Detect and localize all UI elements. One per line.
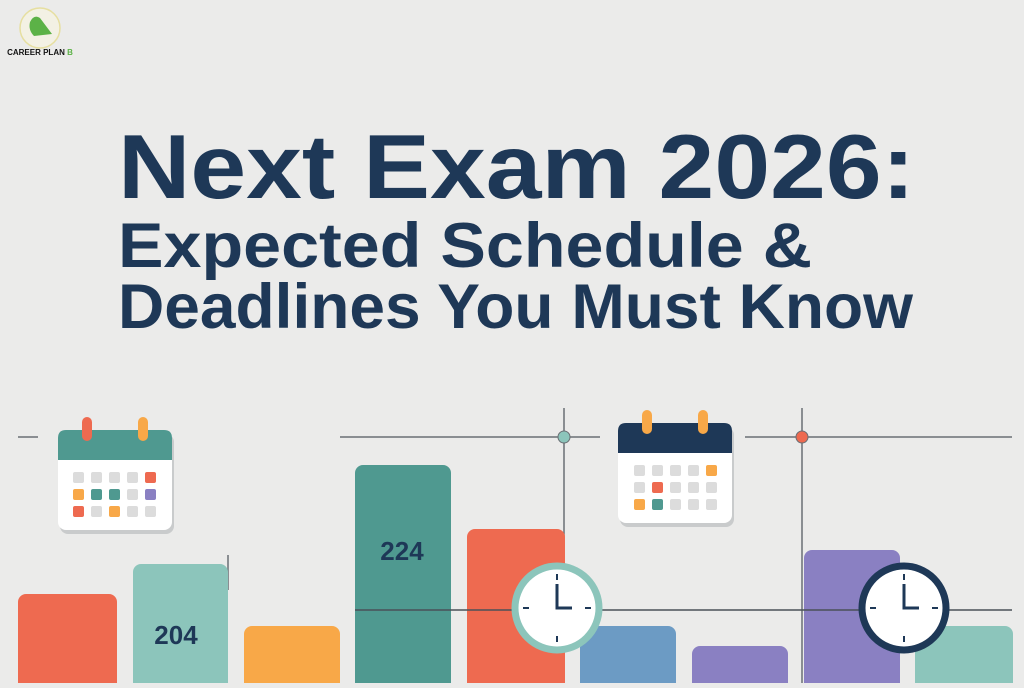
bar chart [18, 465, 1013, 688]
icon: calendar 1 [58, 417, 174, 534]
bar chart: 224 [380, 536, 424, 566]
grid lines [18, 408, 1012, 683]
title: Expected Schedule & [118, 211, 812, 281]
bar chart: 204 [154, 620, 198, 650]
markers [558, 431, 808, 443]
title [118, 117, 915, 342]
logo: CAREER PLAN B [7, 48, 73, 57]
icon: clock 1 [515, 566, 599, 650]
title: Next Exam 2026: [118, 117, 915, 218]
title: Deadlines You Must Know [118, 272, 914, 342]
logo [7, 8, 73, 57]
icon: clock 2 [862, 566, 946, 650]
icon: calendar 2 [618, 410, 734, 527]
